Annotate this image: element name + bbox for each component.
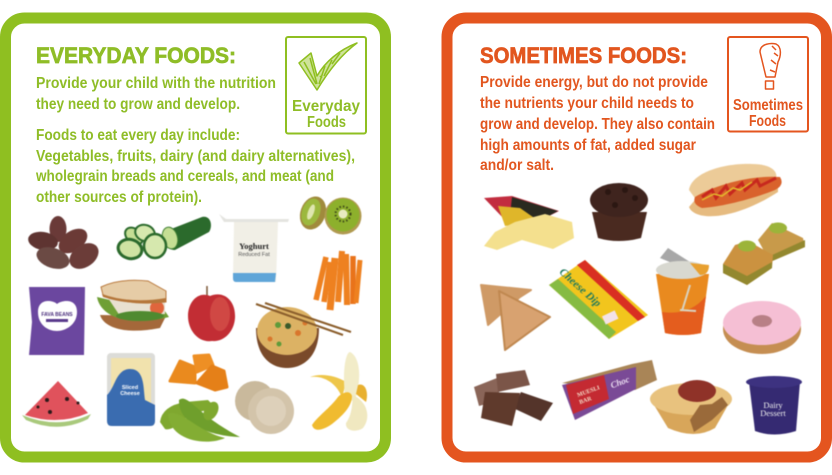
food: rice bowl (256, 303, 351, 368)
text: sometimes intro: high amounts of fat, added sugar (480, 137, 696, 154)
text: everyday intro: Provide your child with the nutrition (36, 75, 276, 92)
icon: sometimes foods badge: Sometimes (733, 97, 803, 114)
food: sandwich (97, 280, 169, 331)
food: dates (27, 216, 103, 274)
food: chocolate (474, 370, 553, 426)
text: sometimes intro: the nutrients your child needs to (480, 95, 694, 112)
food: cucumber (116, 217, 211, 261)
food: potato chips (484, 196, 574, 250)
text: foods to eat every day: Vegetables, fruits, dairy (and dairy alternatives), (36, 148, 355, 165)
food: carrot sticks (316, 251, 360, 310)
icon: everyday foods badge (286, 37, 366, 134)
icon: sometimes foods badge: Foods (749, 113, 786, 130)
text: foods to eat every day (35, 127, 355, 206)
food: dairy dessert (746, 376, 802, 434)
heading: everyday foods: EVERYDAY FOODS: (36, 43, 236, 68)
food: dairy dessert: Dessert (760, 408, 786, 418)
text: sometimes intro: and/or salt. (480, 157, 554, 174)
food: sliced cheese: Cheese (120, 391, 140, 397)
panel: sometimes foods (447, 18, 826, 457)
text: sometimes intro (480, 74, 715, 174)
heading: sometimes foods: SOMETIMES FOODS: (480, 43, 687, 68)
food: hot dog (689, 164, 782, 216)
food: sliced cheese (107, 353, 155, 426)
food: muesli bar (562, 360, 657, 420)
icon: everyday foods badge: Foods (307, 114, 346, 131)
food: yoghurt (219, 214, 289, 282)
text: sometimes intro: grow and develop. They also contain (480, 116, 715, 133)
text: everyday intro (36, 75, 276, 113)
food: rice cakes (235, 381, 294, 434)
text: sometimes intro: Provide energy, but do not provide (480, 74, 708, 91)
food: baklava (723, 222, 805, 285)
food: meat pie (650, 380, 732, 434)
food: sliced cheese: Sliced (122, 385, 138, 391)
icon: sometimes foods badge (728, 37, 808, 132)
food: yoghurt: Reduced Fat (238, 252, 270, 258)
food: cheese dip (549, 260, 648, 339)
food: doughnut (723, 301, 801, 354)
food: muesli bar: Choc (609, 374, 631, 390)
icon: everyday foods badge: Everyday (292, 98, 360, 115)
food: apple (188, 286, 235, 341)
food: muesli bar: BAR (579, 396, 593, 406)
food: chocolate muffin (590, 183, 648, 241)
food: fava beans bag: FAVA BEANS (41, 312, 73, 318)
food: dairy dessert: Dairy (763, 400, 783, 410)
text: everyday intro: they need to grow and develop. (36, 96, 240, 113)
food: noodle cup (656, 248, 709, 335)
text: foods to eat every day: Foods to eat every day include: (36, 127, 240, 144)
text: foods to eat every day: other sources of protein). (36, 189, 202, 206)
food: muesli bar: MUESLI (577, 385, 601, 399)
food: samosas (481, 285, 550, 350)
food: edamame (160, 399, 240, 442)
food: banana (310, 352, 367, 431)
food: watermelon (22, 381, 91, 427)
food: cheese dip: Cheese Dip (557, 266, 604, 310)
food: yoghurt: Yoghurt (239, 241, 269, 251)
food: pumpkin (170, 355, 227, 390)
text: foods to eat every day: wholegrain breads and cereals, and meat (and (35, 168, 334, 185)
food: kiwi (295, 193, 362, 234)
panel: everyday foods (6, 18, 386, 457)
icon: exclamation mark (760, 44, 780, 89)
food: fava beans bag (29, 287, 85, 355)
icon: tick (299, 43, 357, 90)
